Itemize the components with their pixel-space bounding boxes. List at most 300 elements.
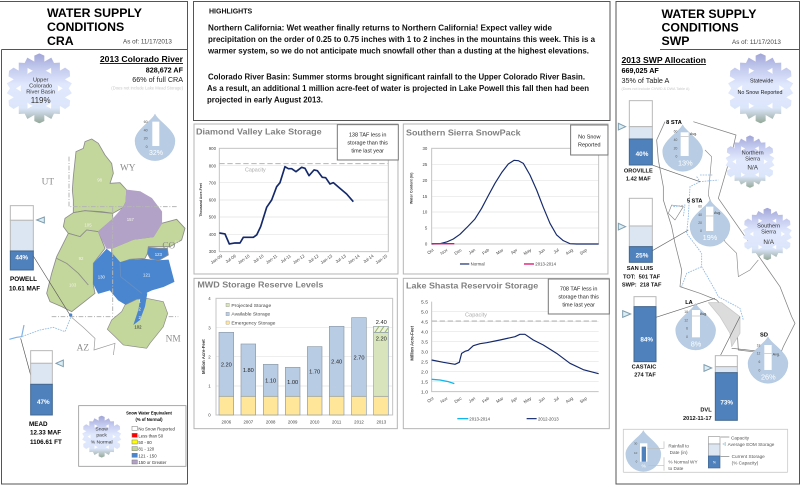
Southern California shaded region: [708, 303, 740, 347]
chart panel: Lake Shasta Reservoir Storage: 5.5: [421, 299, 428, 305]
SD rainfall drop: 12: [757, 352, 760, 356]
chart panel: Southern Sierra SnowPack: Jul: [552, 247, 560, 255]
Powell reservoir bar: 44%: [15, 254, 28, 261]
San Luis reservoir bar: 25%: [636, 252, 649, 259]
chart panel: MWD Storage Reserve Levels: 2006: [222, 420, 232, 425]
LA rainfall drop: [676, 300, 716, 350]
map labels: 105: [84, 222, 92, 227]
chart panel: Diamond Valley Lake Storage: Jan-14: [347, 253, 361, 265]
map labels: 2: [138, 307, 141, 312]
chart panel: Lake Shasta Reservoir Storage: 5.0: [421, 309, 428, 315]
8 STA rainfall drop: 8 STA: [666, 120, 682, 126]
chart panel: Lake Shasta Reservoir Storage: 2.0: [421, 369, 428, 375]
chart panel: Lake Shasta Reservoir Storage: [403, 278, 609, 429]
icon: Upper Colorado snowflake: Colorado: [29, 84, 52, 90]
Oroville reservoir bar: OROVILLE: [624, 168, 653, 174]
as-of date CRA: As of: 11/17/2013: [123, 38, 172, 46]
map region right green: [112, 219, 185, 263]
chart panel: MWD Storage Reserve Levels: 2012: [354, 420, 364, 425]
map labels: 1: [138, 298, 141, 303]
chart title DVL: Diamond Valley Lake Storage: [196, 127, 322, 137]
heading: SWP title: SWP: [662, 34, 690, 48]
icon: rainfall drop 32%: [135, 114, 175, 161]
Castaic reservoir bar: CASTAIC: [632, 365, 656, 371]
bar value labels: [221, 320, 387, 386]
chart panel: Lake Shasta Reservoir Storage: 2.5: [421, 359, 428, 365]
chart panel: Southern Sierra SnowPack: 5: [425, 226, 428, 231]
legend: reservoir key: %: [641, 464, 646, 470]
chart panel: MWD Storage Reserve Levels: Million Acre-Feet: [201, 339, 206, 374]
text: Colorado River Basin: [207, 72, 589, 104]
chart panel: Lake Shasta Reservoir Storage: Oct: [426, 395, 435, 404]
callout: Shasta: storage than this: [558, 295, 599, 301]
bar value labels: 1.80: [243, 368, 254, 374]
Southern Sierra snowflake: [741, 208, 794, 260]
chart panel: MWD Storage Reserve Levels: 4: [208, 296, 211, 301]
chart panel: Lake Shasta Reservoir Storage: 4.0: [421, 329, 428, 335]
chart panel: Southern Sierra SnowPack: Water Content (in): [409, 172, 413, 204]
8 STA rainfall drop: 20: [674, 146, 677, 150]
California map: [657, 122, 795, 355]
panel: CRA water supply: [0, 2, 188, 484]
icon: rainfall drop 32%: 60: [144, 120, 148, 124]
8 STA rainfall drop: [663, 120, 703, 171]
legend: reservoir key: Rainfall to: [668, 443, 689, 448]
state labels: AZ: [77, 344, 89, 354]
chart panel: Diamond Valley Lake Storage: 300: [209, 249, 217, 254]
5 STA rainfall drop: 5 STA: [687, 198, 702, 204]
5 STA rainfall drop: 40: [698, 213, 702, 217]
Southern Sierra snowflake: Sierra: [761, 230, 777, 236]
Powell label: [9, 276, 40, 292]
callout: DVL: 138 TAF less in: [349, 132, 386, 138]
bar value labels: 2.40: [331, 359, 342, 365]
legend: snow water equivalent: pack: [96, 433, 107, 439]
chart panel: MWD Storage Reserve Levels: 2009: [288, 420, 298, 425]
chart panel: Southern Sierra SnowPack: Jun: [537, 247, 546, 255]
legend: reservoir key: (% Capacity): [732, 461, 759, 466]
SD rainfall drop: 26%: [761, 372, 776, 381]
capacity line Shasta: Capacity: [465, 313, 487, 319]
legend: reservoir key: [623, 429, 788, 472]
callout: Shasta: time last year: [562, 303, 595, 309]
chart panel: Southern Sierra SnowPack: Jan: [468, 247, 477, 255]
5 STA rainfall drop: [687, 198, 730, 246]
Oroville reservoir bar: 40%: [636, 151, 649, 158]
SD rainfall drop: 18: [757, 344, 760, 348]
Castaic reservoir bar: 274 TAF: [634, 373, 656, 379]
legend Shasta: [457, 416, 559, 421]
text: Northern California: Northern California: Wet weather finally returns to Northern California! Expect valley wide: [208, 24, 553, 32]
chart panel: Lake Shasta Reservoir Storage: Mar: [495, 395, 505, 404]
5 STA rainfall drop: 19%: [703, 233, 718, 242]
callout: no snow reported: No Snow: [578, 134, 600, 140]
chart panel: Southern Sierra SnowPack: Dec: [453, 247, 463, 256]
map regions 121 and 130: [93, 249, 174, 305]
map region 98: [72, 139, 127, 213]
legend: reservoir key: 10: [634, 451, 638, 455]
map narrow blue region: [133, 292, 147, 325]
text: Colorado River Basin: Colorado River Basin: Summer storms brought significant rainfall to the Upper Colorado River Basin.: [208, 72, 585, 82]
legend: snow water equivalent: Snow: [95, 427, 108, 433]
legend: reservoir key: to Date: [668, 466, 684, 471]
San Luis reservoir bar: [618, 198, 662, 289]
LA rainfall drop: Avg.: [700, 312, 707, 316]
Northern Sierra snowflake: Sierra: [745, 157, 761, 163]
Southern Sierra snowflake: N/A: [763, 239, 775, 246]
SD rainfall drop: [748, 333, 788, 383]
callout: Shasta: [548, 279, 609, 314]
chart panel: Diamond Valley Lake Storage: 600: [209, 198, 217, 203]
map labels: [69, 177, 180, 329]
legend Shasta: 2013-2014: [469, 416, 491, 421]
bar value labels: 1.10: [265, 378, 276, 384]
SD rainfall drop: 6: [758, 360, 760, 364]
chart panel: Southern Sierra SnowPack: 20: [422, 178, 428, 183]
bar value labels: 2.20: [376, 337, 387, 343]
callout: no snow reported: Reported: [578, 143, 601, 149]
state labels: WY: [120, 164, 136, 174]
San Luis reservoir bar: TOT: 501 TAF: [623, 274, 661, 280]
Castaic reservoir bar: 84%: [640, 337, 653, 344]
legend MWD: Projected Storage: [231, 303, 271, 309]
chart panel: Diamond Valley Lake Storage: Thousand Acre-Feet: [199, 182, 203, 217]
legend MWD: Available Storage: [231, 312, 271, 318]
DVL storage line: [219, 167, 353, 244]
Powell label: POWELL: [10, 276, 37, 283]
chart title snowpack: Southern Sierra SnowPack: [406, 127, 521, 137]
Northern Sierra snowflake: [724, 135, 776, 188]
SD rainfall drop: SD: [760, 333, 768, 339]
icon: rainfall drop 32%: 40: [144, 128, 148, 132]
legend: snow water equivalent: Less than 50: [138, 433, 164, 438]
chart panel: Diamond Valley Lake Storage: [194, 124, 398, 274]
chart panel: Diamond Valley Lake Storage: Jan-09: [210, 253, 224, 265]
Northern Sierra snowflake: N/A: [747, 164, 759, 171]
LA rainfall drop: 6: [686, 327, 688, 331]
chart panel: Lake Shasta Reservoir Storage: 4.5: [421, 319, 428, 325]
5 STA rainfall drop: Avg.: [714, 211, 721, 215]
DVL reservoir bar: [683, 356, 737, 422]
8 STA rainfall drop: 40: [674, 138, 677, 142]
San Luis reservoir bar: SWP: 218 TAF: [622, 283, 662, 289]
callout: DVL: [337, 125, 398, 160]
map region 157: [98, 190, 162, 248]
icon: Upper Colorado snowflake: River Basin: [26, 90, 55, 96]
bar value labels: 1.00: [287, 380, 298, 386]
DVL reservoir bar: 73%: [720, 399, 733, 406]
SD rainfall drop: Avg.: [773, 352, 780, 356]
callout: DVL: time last year: [351, 148, 384, 154]
legend: reservoir key: %: [713, 461, 716, 465]
legend MWD: [226, 303, 276, 326]
normal snowpack curve: [432, 160, 599, 244]
chart panel: Diamond Valley Lake Storage: 500: [209, 215, 217, 220]
chart panel: Southern Sierra SnowPack: 0: [425, 242, 428, 247]
legend snowpack: 2013-2014: [535, 262, 557, 267]
DVL reservoir bar: DVL: [700, 408, 712, 414]
heading: highlights: HIGHLIGHTS: [209, 8, 252, 16]
callout: Shasta: 708 TAF less in: [560, 287, 597, 293]
icon: rainfall drop 32%: 32%: [149, 150, 163, 157]
legend Shasta: 2012-2013: [538, 416, 559, 421]
Northern Sierra snowflake: Northern: [742, 150, 764, 156]
chart panel: Diamond Valley Lake Storage: Jul-14: [362, 253, 375, 264]
legend: reservoir key: Capacity: [731, 435, 750, 440]
map region 123: [147, 247, 168, 261]
Mead reservoir bar: [31, 351, 63, 415]
map labels: 102: [134, 324, 142, 329]
callout: no snow reported: [571, 125, 608, 155]
legend: snow water equivalent: 150 or Greater: [138, 460, 167, 465]
panel: SWP water supply: [616, 2, 800, 484]
map labels: 157: [127, 217, 135, 222]
Statewide snowflake: No Snow Reported: [737, 90, 783, 96]
chart panel: Diamond Valley Lake Storage: 900: [209, 146, 217, 151]
legend: reservoir key: 0: [636, 460, 638, 464]
8 STA rainfall drop: 13%: [678, 158, 693, 167]
map labels: 121: [143, 273, 151, 278]
text: Colorado River Basin: projected in early August 2013.: [207, 96, 323, 104]
heading: CRA title: CRA: [47, 34, 74, 48]
state labels: CO: [162, 241, 176, 251]
legend: reservoir key: Current Storage: [732, 454, 765, 459]
chart panel: Diamond Valley Lake Storage: Jan-12: [292, 253, 306, 265]
legend: reservoir key: 30: [634, 442, 638, 446]
Mead label: 12.33 MAF: [30, 430, 61, 436]
river and leader lines: [9, 255, 115, 375]
Mead label: 1106.61 FT: [30, 439, 62, 446]
Colorado River allocation text: (Does not include Lake Mead Storage): [111, 86, 184, 90]
icon: Upper Colorado snowflake: Upper: [33, 78, 48, 84]
bar value labels: 1.70: [309, 370, 320, 376]
chart panel: Lake Shasta Reservoir Storage: 3.5: [421, 339, 428, 345]
chart panel: Lake Shasta Reservoir Storage: Jun: [537, 395, 546, 404]
icon: rainfall drop 32%: 0: [146, 145, 148, 149]
5 STA rainfall drop: 60: [698, 204, 702, 208]
LA rainfall drop: LA: [685, 300, 693, 306]
Powell label: 10.61 MAF: [9, 286, 40, 292]
chart panel: Southern Sierra SnowPack: Feb: [481, 247, 491, 256]
map region 102: [107, 298, 168, 348]
Colorado River allocation text: 66% of full CRA: [132, 75, 183, 84]
Powell reservoir bar: [10, 206, 44, 270]
chart panel: Southern Sierra SnowPack: Apr: [510, 247, 519, 255]
text: Northern California: warmer system, so we do not anticipate much snowfall other than a dusting at the highest elevations.: [207, 46, 589, 56]
5 STA rainfall drop: 20: [698, 221, 702, 225]
map labels: 98: [97, 177, 103, 182]
chart panel: Southern Sierra SnowPack: Sep: [579, 247, 588, 256]
callout: DVL: storage than this: [347, 140, 388, 146]
chart panel: MWD Storage Reserve Levels: 2010: [310, 420, 320, 425]
legend: snow water equivalent: 121 - 150: [138, 453, 157, 458]
legend: snow water equivalent: [79, 406, 186, 466]
chart panel: Southern Sierra SnowPack: [403, 124, 608, 274]
text: Colorado River Basin: As a result, an additional 1 million acre-feet of water is projected in Lake Powell this fall then had been: [207, 84, 589, 93]
chart panel: Diamond Valley Lake Storage: Jan-13: [320, 253, 334, 265]
chart panel: Southern Sierra SnowPack: 10: [422, 210, 428, 215]
legend: snow water equivalent: No Snow Reported: [138, 426, 175, 431]
heading: SWP title: WATER SUPPLY: [662, 7, 756, 21]
Statewide snowflake: Statewide: [750, 78, 773, 84]
chart panel: MWD Storage Reserve Levels: 2008: [266, 420, 276, 425]
icon: Upper Colorado snowflake: 119%: [31, 96, 51, 105]
chart panel: Lake Shasta Reservoir Storage: Nov: [439, 395, 449, 404]
legend: snow water equivalent: 50 - 80: [138, 440, 152, 445]
chart panel: Southern Sierra SnowPack: May: [523, 247, 533, 256]
chart title Shasta: Lake Shasta Reservoir Storage: [406, 280, 538, 290]
legend: snow water equivalent: (% of Normal): [135, 417, 163, 422]
chart panel: Lake Shasta Reservoir Storage: Sep: [579, 395, 588, 404]
aqueducts: [673, 175, 743, 320]
chart panel: Lake Shasta Reservoir Storage: Dec: [453, 395, 463, 404]
chart panel: MWD Storage Reserve Levels: 0: [208, 413, 211, 418]
chart panel: Lake Shasta Reservoir Storage: Apr: [510, 395, 519, 404]
heading: CRA title: WATER SUPPLY: [47, 6, 142, 20]
legend: snow water equivalent: Snow Water Equivalent: [126, 410, 172, 415]
chart panel: MWD Storage Reserve Levels: 1: [208, 384, 211, 389]
Colorado basin map: [47, 139, 185, 317]
Colorado River allocation text: [100, 54, 184, 90]
chart panel: MWD Storage Reserve Levels: 2011: [332, 420, 342, 425]
chart panel: Lake Shasta Reservoir Storage: Aug: [565, 395, 574, 404]
chart panel: MWD Storage Reserve Levels: 2013: [376, 420, 387, 425]
map labels: 11: [175, 240, 180, 245]
heading: CRA title: [47, 6, 142, 48]
as-of date SWP: As of: 11/17/2013: [732, 39, 781, 46]
bar value labels: 2.40: [376, 320, 387, 326]
chart panel: Lake Shasta Reservoir Storage: Million Acre-Feet: [410, 325, 415, 361]
Mead reservoir bar: 47%: [37, 399, 50, 406]
chart panel: Lake Shasta Reservoir Storage: Jan: [468, 395, 477, 404]
heading: SWP title: CONDITIONS: [662, 20, 739, 34]
chart panel: Lake Shasta Reservoir Storage: 3.0: [421, 349, 428, 355]
chart panel: Southern Sierra SnowPack: Mar: [495, 247, 505, 256]
Statewide snowflake: [726, 53, 796, 123]
chart panel: Lake Shasta Reservoir Storage: 1.5: [421, 379, 428, 385]
5 STA rainfall drop: 0: [700, 229, 702, 233]
map regions 92 and 103: [47, 230, 105, 312]
legend MWD: Emergency Storage: [231, 320, 276, 326]
Colorado River allocation text: 828,672 AF: [146, 66, 184, 74]
map labels: 103: [69, 282, 77, 287]
text: Northern California: [207, 24, 596, 56]
map labels: 92: [79, 256, 84, 261]
chart panel: Southern Sierra SnowPack: 15: [422, 194, 428, 199]
SWP allocation text: 669,025 AF: [622, 66, 659, 75]
DVL reservoir bar: 2012-11-17: [683, 416, 712, 422]
state labels: [42, 164, 181, 354]
heading: SWP title: [662, 7, 756, 48]
chart panel: Southern Sierra SnowPack: 25: [422, 162, 428, 167]
chart panel: Diamond Valley Lake Storage: 700: [209, 180, 217, 185]
chart title MWD: MWD Storage Reserve Levels: [197, 280, 324, 290]
SWP allocation text: [622, 55, 706, 91]
California state outline: [657, 122, 795, 355]
legend: snow water equivalent: 81 - 120: [138, 447, 155, 452]
stacked bars: [219, 318, 388, 415]
map labels: 2: [138, 315, 141, 320]
legend: snow water equivalent: % Normal: [91, 439, 113, 445]
chart panel: Diamond Valley Lake Storage: 800: [209, 163, 217, 168]
Southern Sierra snowflake: Southern: [757, 224, 780, 230]
text: Northern California: precipitation on the order of 0.25 to 0.75 inches with 1 to 2 inches in the mountains this week. This is a: [208, 35, 596, 44]
chart panel: Diamond Valley Lake Storage: Jul-11: [280, 253, 292, 264]
chart panel: Lake Shasta Reservoir Storage: 1.0: [421, 389, 428, 395]
chart panel: MWD Storage Reserve Levels: 2007: [244, 420, 254, 425]
chart panel: Southern Sierra SnowPack: Aug: [565, 247, 574, 256]
chart panel: Lake Shasta Reservoir Storage: May: [523, 395, 533, 405]
Mead label: MEAD: [29, 421, 48, 428]
legend: reservoir key: Average EOM Storage: [728, 442, 775, 447]
Oroville reservoir bar: 1.42 MAF: [626, 177, 651, 183]
Mead label: [29, 421, 62, 446]
current snowpack line: [432, 242, 454, 246]
LA rainfall drop: 18: [684, 310, 688, 314]
map labels: 130: [98, 274, 106, 279]
Oroville reservoir bar: [618, 101, 653, 183]
leader lines: [652, 165, 780, 355]
San Luis reservoir bar: SAN LUIS: [627, 266, 653, 272]
chart panel: MWD Storage Reserve Levels: 2: [208, 354, 211, 359]
chart panel: Southern Sierra SnowPack: 30: [422, 146, 428, 151]
Castaic reservoir bar: [623, 297, 656, 379]
legend snowpack: Normal: [471, 262, 485, 267]
chart panel: Diamond Valley Lake Storage: Jul-13: [334, 253, 347, 264]
legend: reservoir key: % Normal WY: [668, 459, 698, 464]
state labels: UT: [42, 177, 54, 187]
8 STA rainfall drop: Avg.: [690, 132, 697, 136]
chart panel: Diamond Valley Lake Storage: 400: [209, 232, 217, 237]
chart panel: Diamond Valley Lake Storage: Jan-15: [375, 253, 389, 265]
SWP allocation text: 2013 SWP Allocation: [622, 55, 706, 65]
8 STA rainfall drop: 60: [674, 130, 677, 134]
SD rainfall drop: 0: [758, 368, 760, 372]
LA rainfall drop: 8%: [691, 340, 702, 349]
chart panel: MWD Storage Reserve Levels: 3: [208, 325, 211, 330]
SWP allocation text: (Does not include CVWD & DWA Table A): [622, 87, 690, 91]
chart panel: Diamond Valley Lake Storage: Jul-12: [307, 253, 320, 264]
legend snowpack: [460, 262, 557, 267]
2012-2013 line: [432, 334, 599, 374]
LA rainfall drop: 12: [684, 318, 688, 322]
chart panel: Diamond Valley Lake Storage: Jul-10: [252, 253, 265, 264]
map labels: 123: [155, 252, 163, 257]
8 STA rainfall drop: 0: [675, 154, 677, 158]
bar value labels: 2.20: [221, 362, 232, 368]
map region 105: [63, 211, 113, 237]
chart panel: Diamond Valley Lake Storage: Jan-11: [265, 253, 279, 265]
heading: CRA title: CONDITIONS: [47, 20, 124, 34]
capacity line DVL: Capacity: [245, 167, 266, 173]
state labels: NM: [166, 335, 181, 345]
chart panel: Lake Shasta Reservoir Storage: Jul: [552, 396, 560, 403]
chart panel: Southern Sierra SnowPack: Oct: [426, 247, 435, 255]
chart panel: MWD Storage Reserve Levels: [194, 278, 397, 429]
SWP allocation text: 35% of Table A: [622, 76, 670, 85]
chart panel: Southern Sierra SnowPack: Nov: [439, 247, 449, 256]
icon: Upper Colorado snowflake: [4, 53, 74, 123]
legend: reservoir key: Date (in): [670, 450, 688, 455]
bar value labels: 2.70: [353, 356, 364, 362]
2013-2014 line: [432, 379, 454, 384]
chart panel: Diamond Valley Lake Storage: Jul-09: [224, 253, 237, 264]
LA rainfall drop: 0: [686, 335, 688, 339]
icon: rainfall drop 32%: 20: [144, 136, 148, 140]
panel: highlights: [194, 2, 610, 120]
Colorado River allocation text: 2013 Colorado River: [100, 54, 184, 64]
chart panel: Diamond Valley Lake Storage: Jan-10: [237, 253, 251, 265]
